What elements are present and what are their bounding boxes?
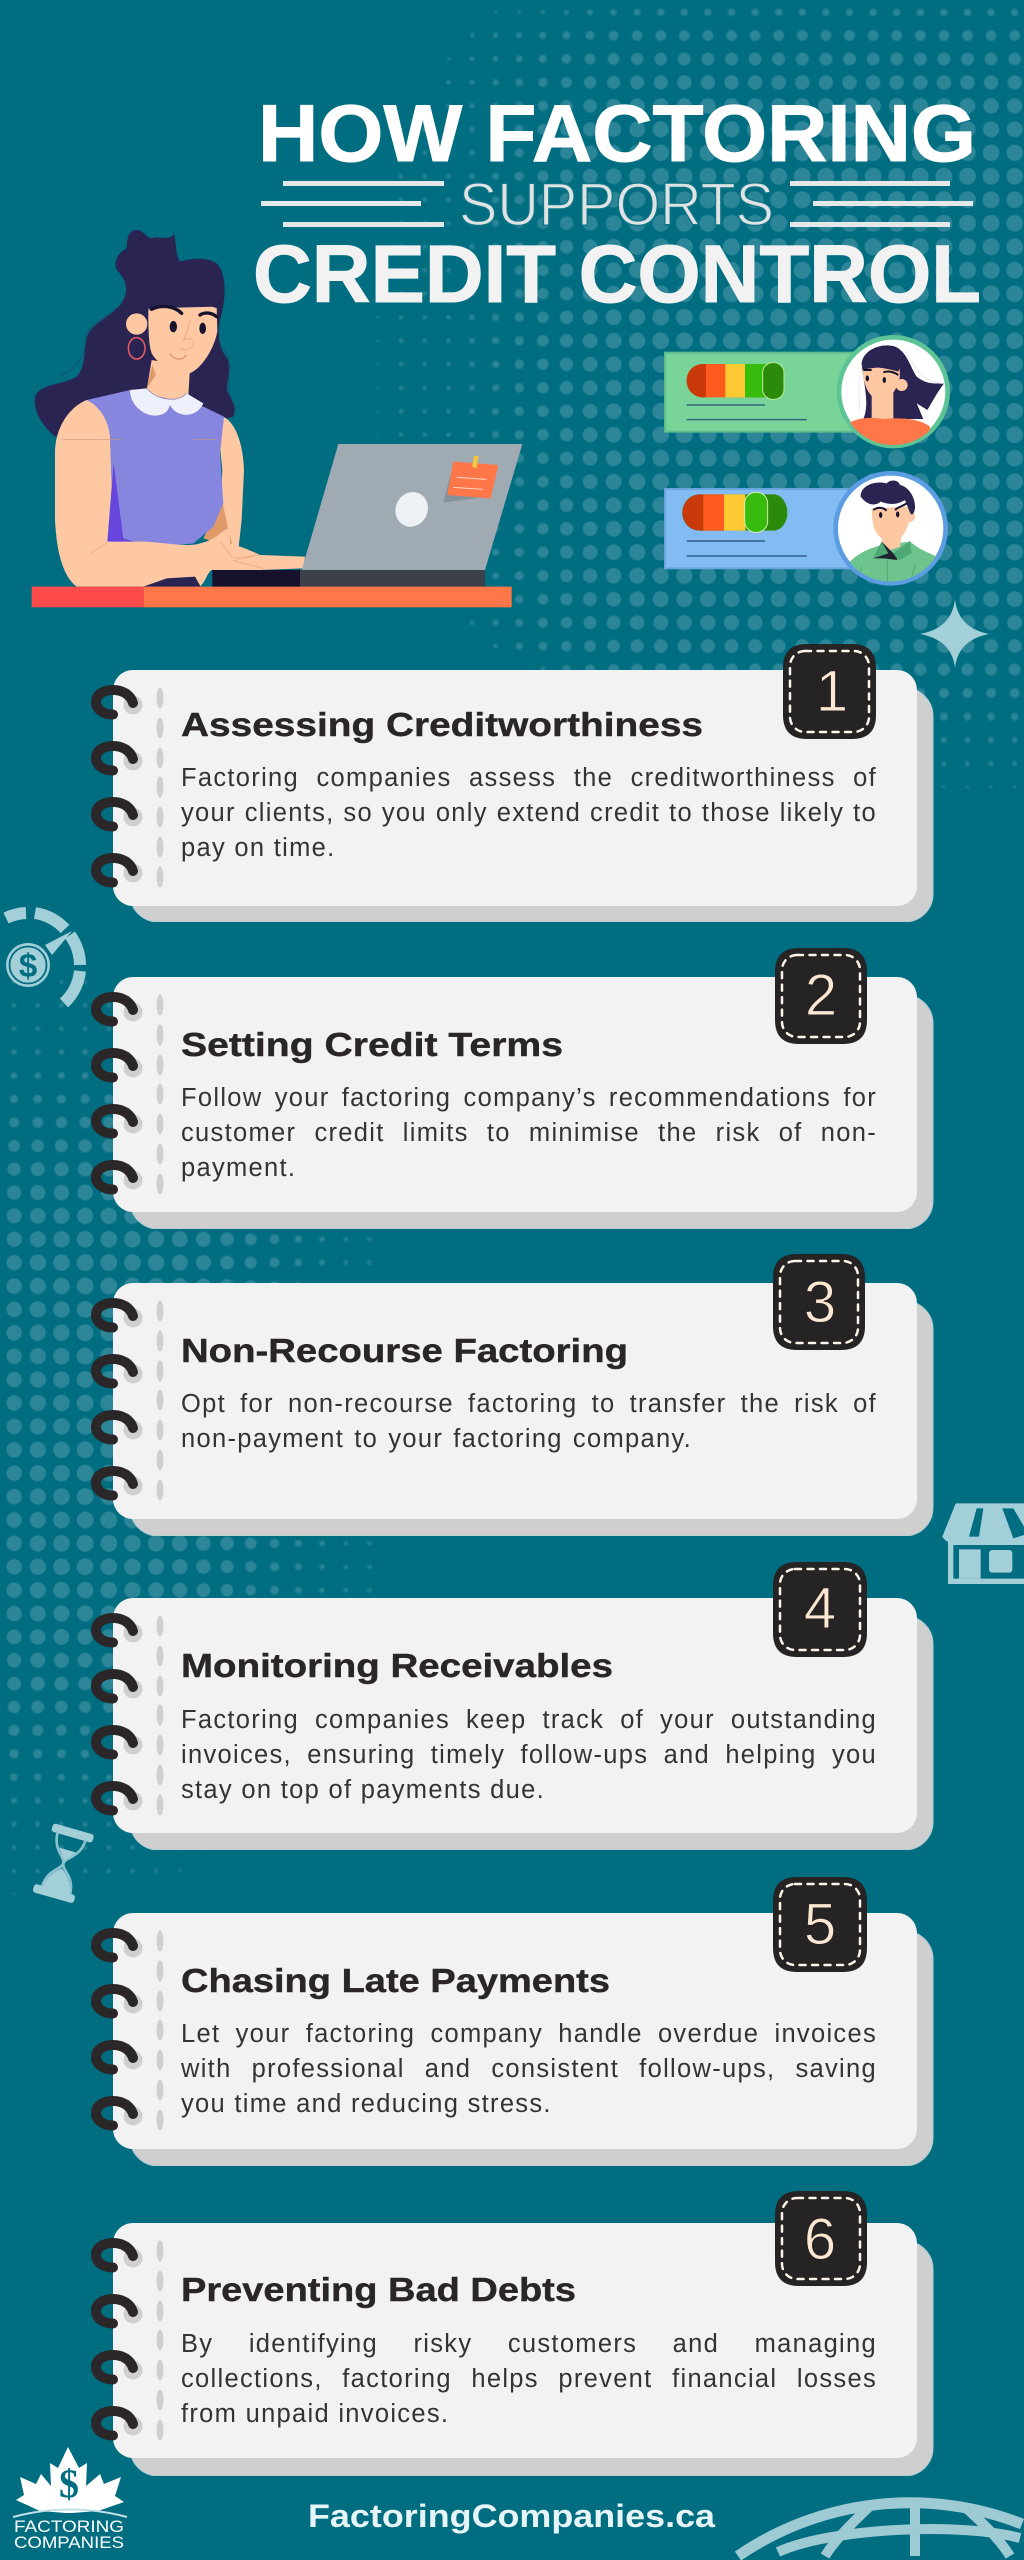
green score card xyxy=(665,337,948,450)
logo: Factoring Companies: FACTORING xyxy=(14,2517,124,2536)
body text: Let your factoring company handle overdue invoices xyxy=(181,2020,877,2048)
body text: Factoring companies assess the creditworthiness of xyxy=(181,764,877,792)
website url: FactoringCompanies.ca xyxy=(308,2498,715,2534)
body text: customer credit limits to minimise the risk of non- xyxy=(181,1119,877,1147)
body text xyxy=(181,2330,877,2428)
body text: pay on time. xyxy=(181,834,336,862)
credit score cards with avatars xyxy=(665,337,948,587)
icon: storefront xyxy=(942,1503,1024,1584)
title: CREDIT CONTROL xyxy=(253,229,981,320)
panel: step 2 setting credit terms xyxy=(91,948,934,1229)
logo: Factoring Companies: $ xyxy=(59,2461,79,2506)
body text xyxy=(181,2020,877,2118)
panel: step 6 preventing bad debts: Preventing Bad Debts xyxy=(181,2271,576,2308)
panel: step 3 non-recourse factoring: Non-Recourse Factoring xyxy=(181,1332,628,1369)
body text: you time and reducing stress. xyxy=(181,2090,552,2118)
left arm and hand xyxy=(55,400,305,587)
body text: collections, factoring helps prevent financial losses xyxy=(181,2365,877,2393)
desk xyxy=(32,587,144,607)
body text: your clients, so you only extend credit to those likely to xyxy=(181,799,877,827)
icon: globe xyxy=(738,2498,1022,2556)
dress xyxy=(87,390,224,545)
panel: step 5 chasing late payments: Chasing Late Payments xyxy=(181,1962,610,1999)
panel: step 1 assessing creditworthiness: 1 xyxy=(816,659,848,724)
body text: Opt for non-recourse factoring to transfer the risk of xyxy=(181,1390,877,1418)
collar xyxy=(130,388,203,416)
body text xyxy=(181,1390,877,1453)
logo: Factoring Companies xyxy=(13,2447,127,2552)
panel: step 6 preventing bad debts xyxy=(91,2191,934,2476)
logo: Factoring Companies: COMPANIES xyxy=(14,2533,124,2552)
body text: payment. xyxy=(181,1154,296,1182)
body text: By identifying risky customers and managing xyxy=(181,2330,877,2358)
panel: step 2 setting credit terms: 2 xyxy=(805,963,837,1028)
body text: non-payment to your factoring company. xyxy=(181,1425,692,1453)
icon: sparkle star xyxy=(920,599,989,668)
illustration: woman at laptop xyxy=(32,230,522,607)
body text xyxy=(181,1084,877,1182)
body text xyxy=(181,1706,877,1804)
panel: step 1 assessing creditworthiness: Assessing Creditworthiness xyxy=(181,706,703,743)
right arm xyxy=(219,417,244,550)
panel: step 6 preventing bad debts: 6 xyxy=(804,2207,836,2272)
body text xyxy=(181,764,877,862)
panel: step 3 non-recourse factoring xyxy=(91,1254,934,1536)
body text: Factoring companies keep track of your outstanding xyxy=(181,1706,877,1734)
panel: step 2 setting credit terms: Setting Credit Terms xyxy=(181,1026,563,1063)
title xyxy=(253,89,981,320)
panel: step 3 non-recourse factoring: 3 xyxy=(804,1270,836,1335)
body text: from unpaid invoices. xyxy=(181,2400,449,2428)
body text: stay on top of payments due. xyxy=(181,1776,545,1804)
neck and face xyxy=(147,360,190,402)
hair xyxy=(35,230,235,437)
panel: step 4 monitoring receivables xyxy=(91,1562,934,1850)
panel: step 5 chasing late payments: 5 xyxy=(804,1892,836,1957)
icon: hourglass xyxy=(32,1823,94,1904)
laptop xyxy=(302,444,522,570)
panel: step 4 monitoring receivables: Monitoring Receivables xyxy=(181,1647,613,1684)
blue score card xyxy=(665,473,946,587)
icon: credit score gauge with dollar: $ xyxy=(19,947,37,984)
body text: invoices, ensuring timely follow-ups and helping you xyxy=(181,1741,877,1769)
icon: credit score gauge with dollar xyxy=(6,913,80,1003)
panel: step 4 monitoring receivables: 4 xyxy=(804,1576,836,1641)
title: SUPPORTS xyxy=(459,171,774,238)
panel: step 5 chasing late payments xyxy=(91,1877,934,2166)
body text: with professional and consistent follow-ups, saving xyxy=(181,2055,877,2083)
panel: step 1 assessing creditworthiness xyxy=(91,644,934,922)
title: HOW FACTORING xyxy=(258,89,976,179)
body text: Follow your factoring company’s recommendations for xyxy=(181,1084,877,1112)
